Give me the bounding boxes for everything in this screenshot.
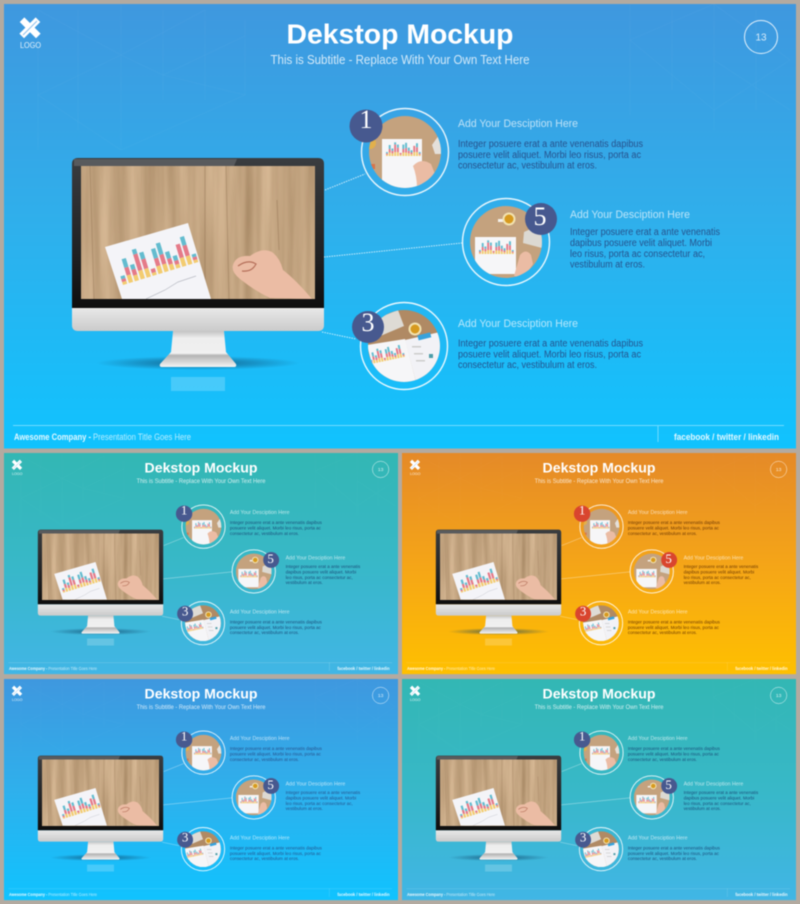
callout 5: Integer posuere erat a ante venenatis <box>570 227 720 238</box>
callout 5: 5 <box>267 777 274 792</box>
callout 1: Integer posuere erat a ante venenatis dapibus <box>230 520 322 526</box>
callout 3 <box>575 828 720 871</box>
icon: logo: LOGO <box>12 697 22 702</box>
callout 1: posuere velit aliquet. Morbi leo risus, porta ac <box>230 526 321 532</box>
connector lines <box>162 764 232 846</box>
footer <box>406 662 790 671</box>
callout 5: leo risus, porta ac consectetur ac, <box>684 801 751 807</box>
page number badge <box>744 20 778 54</box>
callout 3: Integer posuere erat a ante venenatis dapibus <box>458 338 643 350</box>
callout 3: Add Your Desciption Here <box>230 836 290 842</box>
callout 3: posuere velit aliquet. Morbi leo risus, porta ac <box>230 851 321 857</box>
callout 3: Add Your Desciption Here <box>458 318 578 330</box>
callout 3: consectetur ac, vestibulum at eros. <box>230 856 299 862</box>
page number badge <box>770 687 787 704</box>
callout 3: Integer posuere erat a ante venenatis dapibus <box>628 619 720 625</box>
callout 3 <box>352 302 643 390</box>
callout 5: vestibulum at eros. <box>684 806 721 812</box>
footer: Presentation Title Goes Here <box>446 666 495 671</box>
callout 1: posuere velit aliquet. Morbi leo risus, porta ac <box>230 752 321 758</box>
icon: logo <box>12 686 22 702</box>
callout 1: consectetur ac, vestibulum at eros. <box>458 160 597 172</box>
callout 5: dapibus posuere velit aliquet. Morbi <box>286 795 356 801</box>
callout 1 <box>176 729 322 774</box>
subtitle: This is Subtitle - Replace With Your Own Text Here <box>535 704 664 711</box>
callout 5: Add Your Desciption Here <box>684 555 743 561</box>
icon: logo: LOGO <box>410 697 420 702</box>
footer: Presentation Title Goes Here <box>48 892 97 897</box>
footer: Presentation Title Goes Here <box>446 892 495 897</box>
callout 5: Add Your Desciption Here <box>286 555 345 561</box>
callout 3: Integer posuere erat a ante venenatis dapibus <box>230 845 322 851</box>
callout 5: dapibus posuere velit aliquet. Morbi <box>286 569 356 575</box>
callout 3: Integer posuere erat a ante venenatis dapibus <box>230 619 322 625</box>
footer: Awesome Company - <box>407 666 446 671</box>
callout 5: 5 <box>665 551 672 566</box>
callout 5: 5 <box>534 202 546 231</box>
callout 3: consectetur ac, vestibulum at eros. <box>230 630 299 636</box>
callout 1: 1 <box>181 503 187 518</box>
callout 1: Integer posuere erat a ante venenatis dapibus <box>458 139 643 150</box>
title: Dekstop Mockup <box>286 18 514 50</box>
footer: Presentation Title Goes Here <box>48 666 97 671</box>
subtitle: This is Subtitle - Replace With Your Own Text Here <box>535 478 664 485</box>
icon: logo: LOGO <box>410 471 420 476</box>
connector lines <box>560 538 630 620</box>
icon: logo <box>410 460 420 476</box>
callout 1 <box>574 729 720 774</box>
title: Dekstop Mockup <box>543 686 655 702</box>
footer: Awesome Company - <box>9 892 48 897</box>
panel: teal slide, top left <box>4 453 398 674</box>
callout 3: Add Your Desciption Here <box>628 610 688 616</box>
footer: facebook / twitter / linkedin <box>337 892 390 897</box>
callout 3: 3 <box>580 604 586 619</box>
page number badge: 13 <box>755 32 767 44</box>
page number badge: 13 <box>378 693 384 699</box>
icon: logo <box>19 17 41 50</box>
callout 3 <box>177 602 322 645</box>
page number badge <box>372 461 389 478</box>
callout 3: consectetur ac, vestibulum at eros. <box>458 360 597 371</box>
panel: teal slide, bottom right <box>402 679 796 900</box>
callout 1: Add Your Desciption Here <box>230 510 290 516</box>
callout 5 <box>630 550 759 593</box>
callout 1: posuere velit aliquet. Morbi leo risus, porta ac <box>458 150 641 161</box>
callout 5: dapibus posuere velit aliquet. Morbi <box>684 795 754 801</box>
callout 5 <box>232 776 361 819</box>
callout 3: posuere velit aliquet. Morbi leo risus, porta ac <box>458 350 641 360</box>
callout 5: vestibulum at eros. <box>286 580 323 586</box>
callout 1: Integer posuere erat a ante venenatis dapibus <box>628 746 720 752</box>
footer: facebook / twitter / linkedin <box>337 666 390 671</box>
page number badge: 13 <box>378 467 384 473</box>
callout 3: Integer posuere erat a ante venenatis dapibus <box>628 845 720 851</box>
desktop monitor mockup <box>72 158 324 391</box>
desktop monitor mockup <box>38 530 163 646</box>
callout 3: posuere velit aliquet. Morbi leo risus, porta ac <box>230 625 321 631</box>
footer <box>13 425 784 442</box>
callout 1 <box>350 105 643 196</box>
callout 1: 1 <box>181 729 187 744</box>
footer <box>8 662 392 671</box>
title: Dekstop Mockup <box>543 460 655 476</box>
panel: blue slide, bottom left <box>4 679 398 900</box>
callout 5: Add Your Desciption Here <box>684 781 743 787</box>
title: Dekstop Mockup <box>145 460 257 476</box>
callout 5: vestibulum at eros. <box>570 260 645 270</box>
callout 5: leo risus, porta ac consectetur ac, <box>286 575 353 581</box>
footer <box>406 888 790 897</box>
callout 5: dapibus posuere velit aliquet. Morbi <box>684 569 754 575</box>
footer: Awesome Company - <box>14 432 91 442</box>
icon: logo <box>410 686 420 702</box>
callout 3: consectetur ac, vestibulum at eros. <box>628 856 697 862</box>
callout 5: leo risus, porta ac consectetur ac, <box>286 801 353 807</box>
icon: logo: LOGO <box>12 471 22 476</box>
callout 5: leo risus, porta ac consectetur ac, <box>570 249 705 260</box>
callout 3 <box>575 602 720 645</box>
callout 1 <box>574 503 720 548</box>
callout 3: Add Your Desciption Here <box>230 610 290 616</box>
page number badge: 13 <box>776 693 782 699</box>
callout 1: posuere velit aliquet. Morbi leo risus, porta ac <box>628 526 719 532</box>
callout 5: Add Your Desciption Here <box>286 781 345 787</box>
callout 3: Add Your Desciption Here <box>628 836 688 842</box>
callout 5: Integer posuere erat a ante venenatis <box>286 564 361 570</box>
desktop monitor mockup <box>38 756 163 872</box>
callout 5: 5 <box>267 551 274 566</box>
callout 3 <box>177 828 322 871</box>
page number badge <box>770 461 787 478</box>
callout 1: consectetur ac, vestibulum at eros. <box>230 757 299 763</box>
footer: facebook / twitter / linkedin <box>735 666 788 671</box>
callout 1: 1 <box>360 105 372 134</box>
callout 3: posuere velit aliquet. Morbi leo risus, porta ac <box>628 851 719 857</box>
callout 3: 3 <box>580 830 586 845</box>
subtitle: This is Subtitle - Replace With Your Own Text Here <box>137 704 266 711</box>
callout 5: Add Your Desciption Here <box>570 209 690 221</box>
callout 5 <box>630 776 759 819</box>
callout 1: Add Your Desciption Here <box>458 118 578 130</box>
panel: orange slide, top right <box>402 453 796 674</box>
icon: logo <box>12 460 22 476</box>
callout 1: consectetur ac, vestibulum at eros. <box>628 531 697 537</box>
connector lines <box>162 538 232 620</box>
footer: facebook / twitter / linkedin <box>735 892 788 897</box>
callout 1: Integer posuere erat a ante venenatis dapibus <box>230 746 322 752</box>
connector lines <box>322 174 462 339</box>
footer: Presentation Title Goes Here <box>93 432 191 442</box>
callout 5: dapibus posuere velit aliquet. Morbi <box>570 238 712 249</box>
desktop monitor mockup <box>436 530 561 646</box>
footer <box>8 888 392 897</box>
callout 1: Integer posuere erat a ante venenatis dapibus <box>628 520 720 526</box>
subtitle: This is Subtitle - Replace With Your Own Text Here <box>270 53 530 67</box>
panel: main blue slide <box>4 4 796 448</box>
desktop monitor mockup <box>436 756 561 872</box>
footer: Awesome Company - <box>407 892 446 897</box>
callout 1: Add Your Desciption Here <box>230 736 290 742</box>
callout 3: 3 <box>182 604 188 619</box>
callout 5: Integer posuere erat a ante venenatis <box>286 790 361 796</box>
subtitle: This is Subtitle - Replace With Your Own Text Here <box>137 478 266 485</box>
callout 3: posuere velit aliquet. Morbi leo risus, porta ac <box>628 625 719 631</box>
callout 1: 1 <box>579 729 585 744</box>
callout 1 <box>176 503 322 548</box>
callout 5 <box>462 198 720 286</box>
callout 5: Integer posuere erat a ante venenatis <box>684 790 759 796</box>
footer: Awesome Company - <box>9 666 48 671</box>
callout 5: leo risus, porta ac consectetur ac, <box>684 575 751 581</box>
callout 1: consectetur ac, vestibulum at eros. <box>230 531 299 537</box>
callout 3: 3 <box>362 308 374 337</box>
page number badge: 13 <box>776 467 782 473</box>
callout 1: posuere velit aliquet. Morbi leo risus, porta ac <box>628 752 719 758</box>
callout 5: 5 <box>665 777 672 792</box>
callout 3: consectetur ac, vestibulum at eros. <box>628 630 697 636</box>
callout 1: Add Your Desciption Here <box>628 510 688 516</box>
callout 1: 1 <box>579 503 585 518</box>
page number badge <box>372 687 389 704</box>
callout 1: consectetur ac, vestibulum at eros. <box>628 757 697 763</box>
callout 5: Integer posuere erat a ante venenatis <box>684 564 759 570</box>
callout 1: Add Your Desciption Here <box>628 736 688 742</box>
callout 3: 3 <box>182 830 188 845</box>
callout 5: vestibulum at eros. <box>684 580 721 586</box>
icon: logo: LOGO <box>20 41 41 50</box>
footer: facebook / twitter / linkedin <box>674 432 779 442</box>
title: Dekstop Mockup <box>145 686 257 702</box>
callout 5 <box>232 550 361 593</box>
callout 5: vestibulum at eros. <box>286 806 323 812</box>
connector lines <box>560 764 630 846</box>
